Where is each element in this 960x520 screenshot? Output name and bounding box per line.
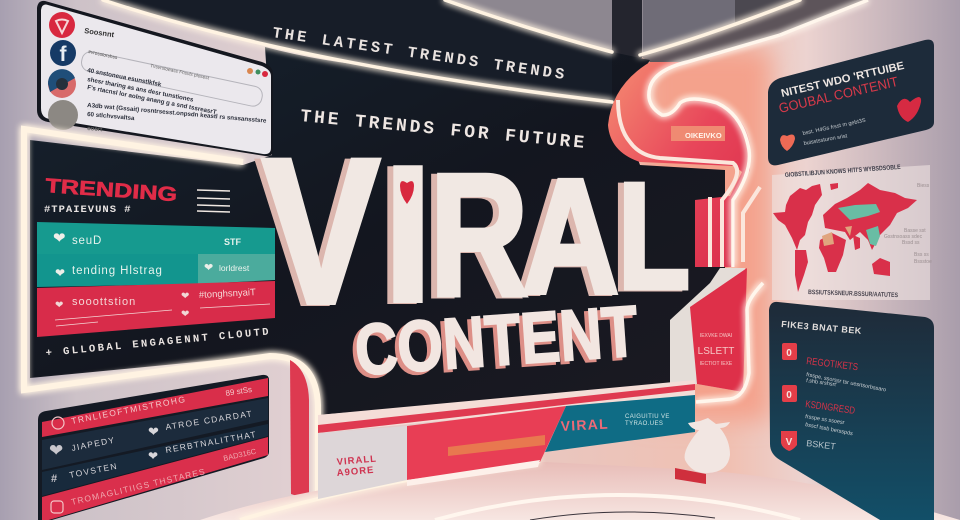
trending panel frame bbox=[24, 129, 318, 500]
shelf red panel bbox=[407, 406, 566, 486]
map title: GIOBSTILIBJUN KNOWS HITI'S WYBSDSOBLE bbox=[785, 164, 901, 179]
ceiling bbox=[440, 0, 868, 62]
dark rows: ❤ bbox=[148, 449, 159, 463]
item 1: frsspe, ssorssr tsr uesrtsorbssaro bbox=[806, 372, 887, 393]
tail text: IECTIOT IEXE bbox=[700, 361, 733, 367]
red row: sooottstion bbox=[72, 296, 136, 308]
right card: global content bbox=[768, 40, 934, 165]
red row bottom: TROMAGLITIIGS THSTARES bbox=[70, 466, 207, 507]
red row: ❤ bbox=[181, 309, 189, 320]
dark rows bbox=[42, 398, 268, 496]
map orange regions bbox=[822, 226, 852, 246]
map caption: BSSIUTSKSNEUR.BSSUR/AATUTES bbox=[808, 289, 899, 299]
item 2: frsspe ss ssoesr bbox=[805, 414, 845, 426]
item 3: V bbox=[786, 437, 793, 448]
large title VIRAL: A bbox=[516, 146, 613, 328]
teal row 1 bbox=[37, 222, 275, 254]
title CONTENT: CONTENT bbox=[353, 291, 640, 391]
red row: ❤ bbox=[55, 300, 63, 311]
map labels: Bssstoe bbox=[914, 259, 932, 265]
large title VIRAL: V bbox=[256, 116, 374, 348]
search bar bbox=[80, 49, 264, 108]
hashtag subtitle: #TPAIEVUNS # bbox=[44, 204, 132, 216]
dark rows: TOVSTEN bbox=[68, 461, 119, 480]
title CONTENT: CONTENT bbox=[349, 294, 636, 394]
post text: coert bbox=[87, 125, 103, 133]
shelf grey panel bbox=[318, 426, 407, 499]
dark rows: JIAPEDY bbox=[70, 435, 116, 453]
letter L: L bbox=[618, 151, 690, 320]
search bar: Tvsvrstoeass Fnsvls plosest bbox=[150, 63, 210, 82]
trending panel bbox=[37, 175, 275, 360]
tail text: IEXVKE DWAI bbox=[700, 333, 732, 339]
shelf grey panel: VIRALL bbox=[336, 454, 377, 468]
right card: stats list bbox=[769, 302, 934, 520]
icon: facebook bbox=[50, 40, 76, 66]
engagement caption: + GLLOBAL ENGAGENNT CLOUTD bbox=[45, 326, 272, 360]
post text bbox=[87, 67, 267, 133]
card heading: NITEST WDO 'RTTUIBE bbox=[780, 60, 905, 100]
map teal regions bbox=[838, 204, 880, 246]
upper neon beam bbox=[780, 0, 868, 35]
item 2: KSDNGRESD bbox=[805, 399, 856, 417]
map labels: Biess bbox=[917, 183, 930, 189]
dark rows: ❤ bbox=[148, 424, 160, 439]
floor bbox=[200, 461, 960, 520]
tail text: LSLETT bbox=[698, 346, 734, 357]
social media card bbox=[37, 1, 273, 156]
teal row 2: ❤ bbox=[55, 266, 65, 280]
red wave blob bbox=[608, 62, 760, 267]
red row top: TRNLIEOFTMISTROHG bbox=[70, 394, 187, 426]
icon: heart badge bbox=[49, 12, 75, 38]
search bar: #vrosstorshss bbox=[88, 49, 118, 61]
red tail panel bbox=[670, 268, 747, 392]
red row: #tonghsnyaiT bbox=[199, 287, 256, 301]
post text: A3db wst (Gssait) rosntrsesst.onpsdn keastl rs snssansstsre bbox=[87, 102, 267, 125]
item 2 bbox=[782, 385, 856, 437]
red row bottom: BAD316C bbox=[222, 447, 258, 463]
item 3 bbox=[781, 431, 837, 452]
post text: 40 snstoneua esunstlkfsk bbox=[87, 67, 162, 88]
map labels: Bssd ss bbox=[902, 240, 920, 246]
map labels bbox=[884, 183, 932, 265]
teal row 2 bbox=[37, 254, 275, 287]
letter V: V bbox=[262, 116, 380, 346]
bottom shelf banner bbox=[318, 380, 695, 499]
heading: latest trends: THE LATEST TRENDS TRENDS bbox=[271, 24, 568, 84]
icon: small heart bbox=[780, 135, 795, 151]
red curved wall bbox=[290, 360, 309, 500]
menu lines bbox=[197, 190, 230, 212]
teal row 2: ❤ bbox=[204, 262, 213, 274]
large title VIRAL: I bbox=[378, 126, 426, 342]
teal row 1: seuD bbox=[72, 235, 102, 247]
shelf teal panel: CAIGUITIU VE bbox=[625, 414, 670, 420]
item 3: BSKET bbox=[806, 438, 837, 452]
icon: photo avatar bbox=[48, 100, 78, 130]
shelf teal panel: VIRAL bbox=[560, 416, 609, 434]
teal row 1: ❤ bbox=[53, 230, 66, 247]
map labels: Gsstnsoass sdec bbox=[884, 234, 923, 240]
icon: instagram bbox=[48, 69, 76, 98]
item 1: 0 bbox=[786, 348, 792, 359]
dark main wall bbox=[30, 47, 725, 415]
lower neon bbox=[696, 283, 763, 402]
item 2: 0 bbox=[786, 390, 792, 401]
letter I: I bbox=[384, 126, 432, 342]
salmon wall glow bbox=[645, 50, 770, 420]
red block bbox=[675, 468, 706, 484]
shelf teal panel: TYRAO.UES bbox=[625, 421, 663, 427]
dark rows: ATROE CDARDAT bbox=[165, 408, 254, 432]
card subheading: GOUBAL CONTENIT bbox=[777, 74, 900, 116]
top dark band bbox=[103, 0, 612, 102]
red row top: 89 stSs bbox=[225, 385, 253, 398]
dark rows: # bbox=[51, 473, 58, 485]
post text: 60 stlchvsvaltsa bbox=[87, 111, 135, 122]
item 2: bsscf tssb bersspds bbox=[805, 422, 853, 437]
icon: heart pin bbox=[400, 181, 414, 204]
map labels: Bss ss bbox=[914, 252, 929, 258]
social status dots bbox=[247, 68, 268, 77]
post text: F's rtacnsl lor aolng anang g a snd tssreasrT bbox=[87, 84, 217, 116]
blob label bbox=[671, 126, 725, 141]
large title VIRAL bbox=[256, 116, 690, 348]
panel heading: FIKE3 BNAT BEK bbox=[781, 319, 862, 336]
blob inner stripe bbox=[618, 100, 760, 267]
item 1 bbox=[782, 343, 887, 393]
post text: shesr tharing as ans desr tunstiones bbox=[87, 76, 194, 104]
blob label: OIKEIVKO bbox=[685, 131, 722, 140]
red row bbox=[37, 281, 275, 337]
teal row 2: tending Hlstrag bbox=[72, 265, 163, 277]
red row top bbox=[42, 378, 268, 437]
card name: Soosnnt bbox=[84, 26, 115, 39]
map land bbox=[773, 183, 917, 292]
trending heading: TRENDING bbox=[45, 175, 178, 206]
teal row 1: STF bbox=[224, 237, 242, 247]
red row bottom bbox=[42, 437, 268, 520]
item 1: REGOTIKETS bbox=[806, 356, 859, 373]
letter R: R bbox=[430, 137, 528, 332]
shelf teal panel bbox=[545, 395, 695, 452]
heading: trends for future: THE TRENDS FOR FUTURE bbox=[299, 107, 588, 154]
card text: bsst. H4Gs frsst m gebt3S bbox=[802, 118, 867, 137]
world map panel bbox=[772, 164, 932, 300]
letter A: A bbox=[522, 144, 619, 328]
large title VIRAL: L bbox=[612, 152, 684, 321]
icon: big heart bbox=[897, 97, 921, 122]
tail text bbox=[698, 333, 734, 367]
map labels: Basse sst bbox=[904, 228, 926, 234]
card text bbox=[802, 118, 867, 147]
large title VIRAL: R bbox=[424, 138, 522, 333]
teal row 2: lorldrest bbox=[219, 263, 250, 273]
figurine bbox=[675, 418, 730, 484]
red row: ❤ bbox=[181, 291, 189, 302]
dark rows: ❤ bbox=[49, 441, 65, 460]
item 1: f.shb srshsrt' bbox=[806, 378, 837, 388]
neon path bbox=[649, 35, 780, 267]
dark rows: RERBTNALITTHAT bbox=[165, 429, 258, 455]
shelf grey panel: A9ORE bbox=[336, 465, 375, 479]
glowing strips bbox=[103, 0, 800, 102]
icon: facebook: f bbox=[60, 43, 68, 66]
card text: buisstssturon srist bbox=[803, 133, 848, 147]
hashtag list panel bbox=[38, 375, 269, 520]
